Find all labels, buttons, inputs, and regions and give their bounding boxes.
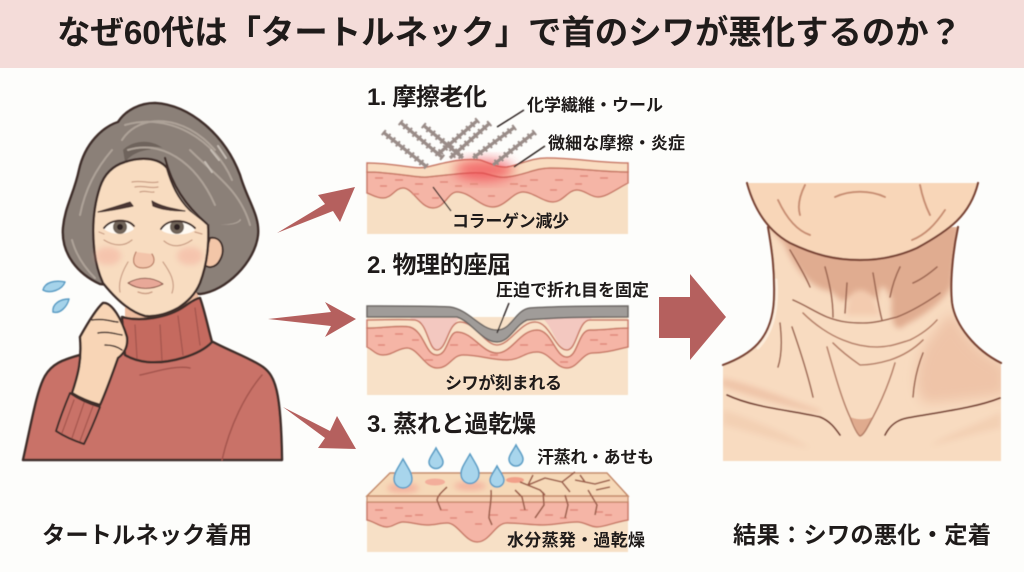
shoulder and neck skin [723,227,1001,461]
arrow: woman to physical buckling [268,302,356,337]
label: fold fixed by pressure: 圧迫で折れ目を固定 [496,281,649,300]
label: collagen decrease: コラーゲン減少 [452,212,569,231]
collagen dashes [375,176,608,198]
wool fibers [383,120,535,167]
neck wrinkles [793,293,940,323]
forehead and face wrinkles [99,181,202,293]
label: moisture evaporation and over-dryness: 水分蒸発・過乾燥 [507,531,645,550]
collarbones [727,395,1000,435]
label: micro friction and inflammation: 微細な摩擦・炎症 [548,134,685,153]
diagram: physical buckling skin cross-section [367,303,628,395]
neck shading [723,225,1005,448]
heading: 3. steam and over-dryness: 3. 蒸れと過乾燥 [367,411,536,438]
irritation spots [387,483,419,493]
cracks [437,472,610,525]
gray turtleneck fabric band [367,306,628,342]
face [93,159,208,316]
hand at collar [72,303,127,405]
turtleneck collar [122,298,212,362]
arrow: woman to friction aging [277,187,355,233]
right ear [203,238,223,267]
eyes [104,221,134,234]
neck contour [723,227,1001,365]
chin wrinkles [778,185,945,240]
top skin surface [367,473,628,496]
title banner [0,0,1024,68]
pressure leader line [497,303,509,333]
light pink pockets [410,318,592,349]
diagram: friction aging skin cross-section [367,110,628,234]
illustration: worried older woman in turtleneck [23,103,282,460]
label: synthetic fibers and wool: 化学繊維・ウール [527,95,663,115]
big arrow to result [659,274,726,360]
water drops [394,445,523,488]
label: wrinkles are carved: シワが刻まれる [445,373,562,393]
skin between chin and collar [125,290,203,325]
sweat drops [43,281,65,292]
nose [134,252,154,268]
V-shaped neck tendons [827,347,895,436]
leader lines [433,110,545,211]
inflammation redness [454,159,514,181]
turtleneck sweater body [23,342,282,460]
title banner: なぜ60代は「タートルネック」で首のシワが悪化するのか？ [57,14,962,52]
mouth [128,278,163,288]
heading: 2. physical buckling: 2. 物理的座屈 [367,252,511,279]
blush cheeks [95,247,121,265]
caption: wearing a turtleneck: タートルネック着用 [42,522,252,548]
diagram: steam and dryness skin cross-section [367,445,628,552]
eyebrows [98,202,133,212]
caption: result, wrinkles worsen and set: 結果：シワの悪化・定着 [733,522,991,548]
chin and jaw [747,183,978,260]
heading: 1. friction aging: 1. 摩擦老化 [367,84,487,111]
hair strand over forehead [125,146,240,225]
illustration: wrinkled neck result [723,183,1005,461]
hair [63,103,258,294]
arrow: woman to steam and dryness [283,407,356,449]
sweater cuff [56,393,100,444]
label: sweat and heat rash: 汗蒸れ・あせも [537,448,654,467]
